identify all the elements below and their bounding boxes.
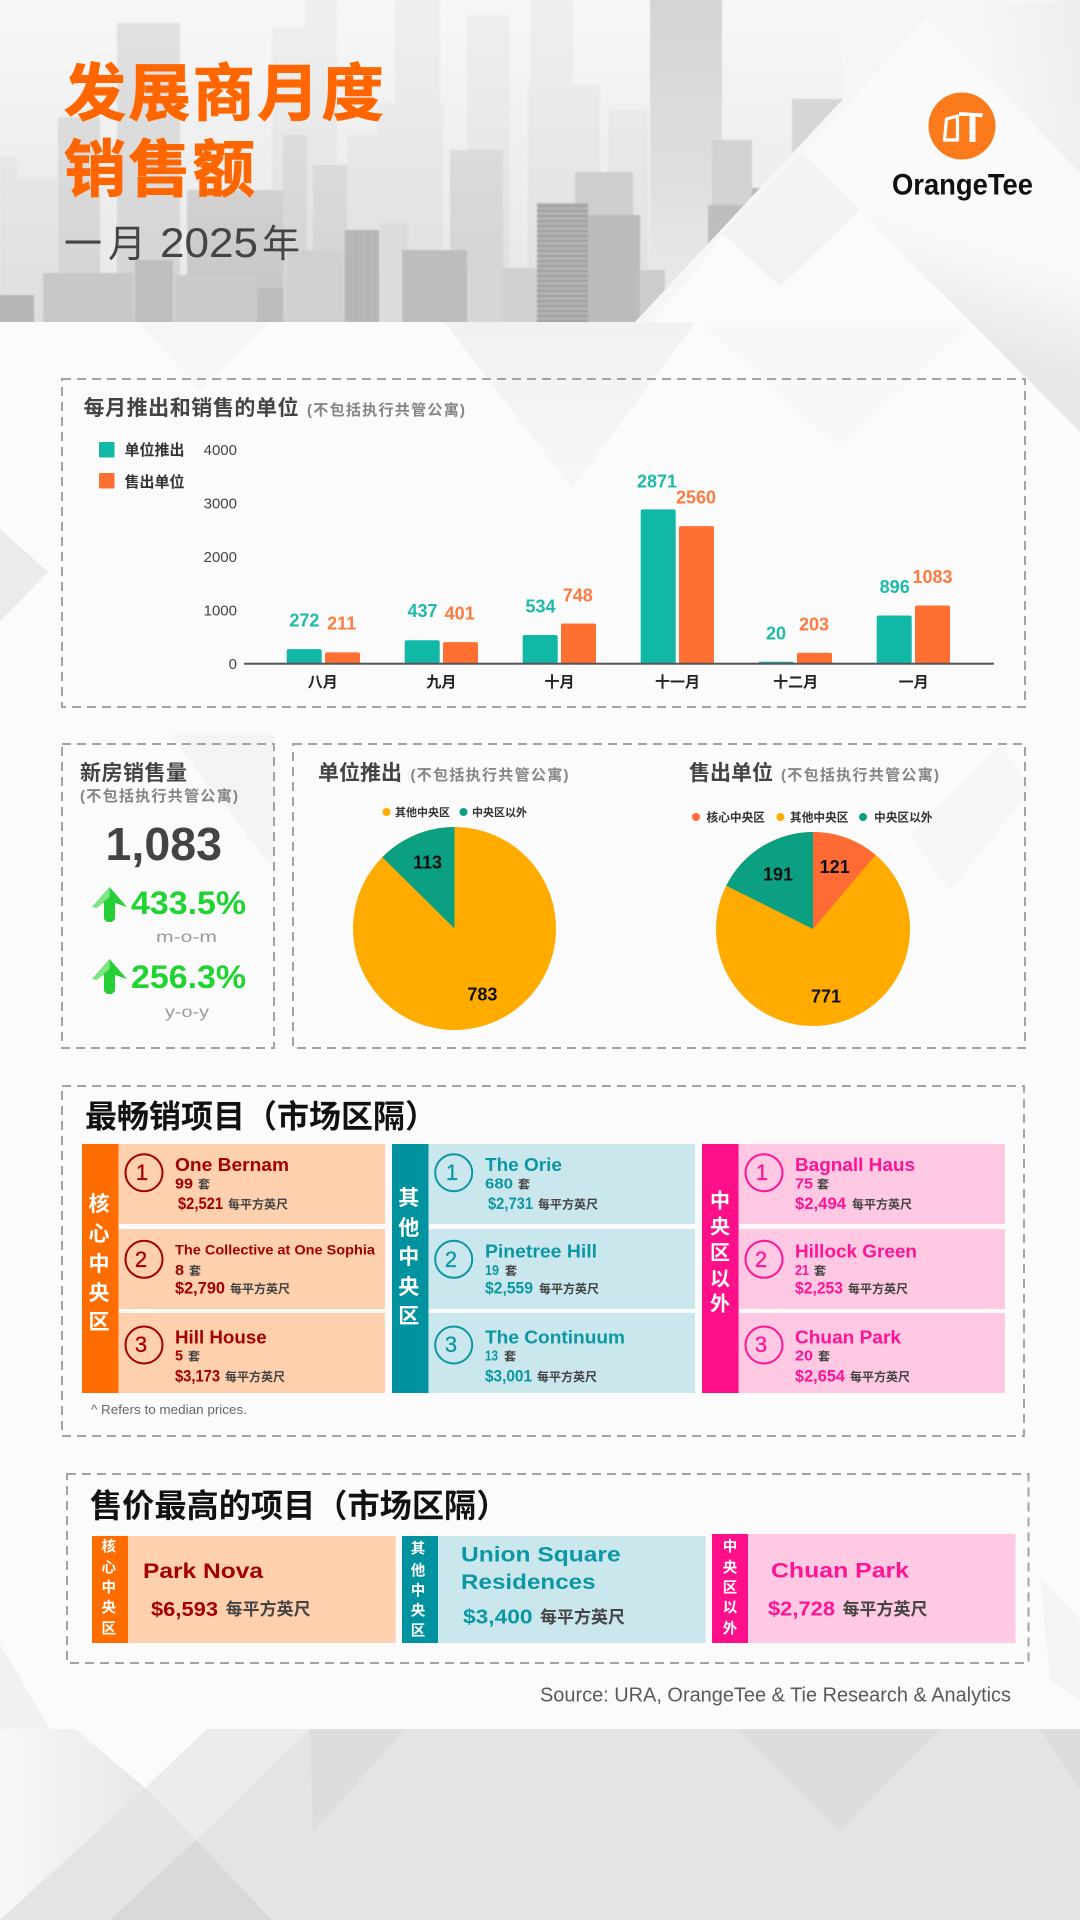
project: Bagnall Haus: Bagnall Haus — [795, 1155, 915, 1175]
project: Bagnall Haus: 套 — [817, 1177, 829, 1192]
source note: Source: URA, OrangeTee & Tie Research & Analytics — [540, 1685, 1011, 1707]
pie legend: launched: 其他中央区 — [395, 805, 450, 819]
bar value labels: 534 — [525, 596, 556, 616]
pie legend: sold — [692, 810, 933, 824]
title: 销售额 — [64, 136, 257, 205]
rank numbers — [755, 1160, 768, 1357]
region label — [88, 1192, 110, 1334]
project: Hillock Green: 21 — [795, 1262, 809, 1279]
project: Hill House: 每平方英尺 — [225, 1369, 285, 1384]
icon: up arrow m-o-m — [92, 887, 127, 922]
logo: OrangeTee — [892, 92, 1033, 202]
region label: 以 — [710, 1268, 730, 1290]
project: The Orie: 每平方英尺 — [538, 1197, 598, 1212]
heading: new home sales: 新房销售量 — [80, 761, 187, 785]
project: Pinetree Hill: 套 — [505, 1263, 517, 1278]
card: core central region: 每平方英尺 — [226, 1599, 311, 1619]
bar chart axis labels: 1000 — [204, 602, 237, 620]
region label: 区 — [88, 1311, 110, 1334]
card: outside central region: 中 — [723, 1538, 737, 1556]
pie chart: sold units — [716, 832, 910, 1026]
chart legend — [99, 441, 185, 491]
bar value labels: 211 — [327, 614, 356, 634]
bar chart axis labels: 4000 — [204, 442, 237, 459]
project: Hill House: 套 — [188, 1349, 200, 1364]
skyline photo header — [0, 0, 847, 325]
region label: 央 — [710, 1216, 730, 1238]
stat: m-o-m growth — [131, 885, 246, 946]
card: rest of central region: 每平方英尺 — [540, 1607, 625, 1627]
rank numbers: 2 — [755, 1247, 767, 1272]
heading: monthly units: (不包括执行共管公寓) — [307, 401, 465, 419]
project: Pinetree Hill — [485, 1242, 599, 1298]
bar value labels: 2560 — [676, 488, 716, 508]
column: core central region — [82, 1144, 385, 1393]
project: Hillock Green: Hillock Green — [795, 1242, 917, 1262]
month labels: 九月 — [426, 674, 456, 691]
project: Bagnall Haus: 每平方英尺 — [852, 1197, 912, 1212]
month labels: 十一月 — [655, 674, 700, 691]
project: The Continuum: $3,001 — [485, 1366, 532, 1385]
card: rest of central region: 中 — [411, 1582, 425, 1600]
heading: sold units — [689, 761, 939, 785]
region label: 央 — [398, 1276, 419, 1299]
bar chart axis labels: 2000 — [204, 549, 237, 566]
card: rest of central region: Union Square — [461, 1544, 621, 1567]
title: 发展商月度 — [64, 60, 386, 129]
heading: monthly units — [84, 396, 465, 420]
project: Chuan Park: 每平方英尺 — [850, 1369, 910, 1384]
project: The Orie: $2,731 — [488, 1194, 533, 1213]
project: Chuan Park: 套 — [818, 1349, 830, 1364]
pie legend: sold: 中央区以外 — [874, 810, 933, 824]
pie chart: launched units: 113 — [413, 852, 442, 872]
month labels: 一月 — [899, 674, 929, 691]
card: core central region: 中 — [101, 1580, 116, 1596]
pie legend: launched — [382, 805, 527, 819]
rank badges — [746, 1154, 782, 1364]
heading: monthly units: 每月推出和销售的单位 — [84, 396, 298, 420]
bar chart axis labels: 3000 — [204, 496, 237, 512]
pie chart: sold units: 771 — [811, 986, 841, 1006]
bar chart axis labels: 0 — [229, 656, 237, 673]
pie legend: launched: 中央区以外 — [472, 805, 527, 819]
chart legend: 售出单位 — [124, 473, 185, 491]
region label: 核 — [88, 1192, 110, 1216]
region label: 心 — [88, 1223, 110, 1246]
stat: y-o-y growth: 256.3% — [131, 959, 246, 995]
project: Pinetree Hill: Pinetree Hill — [485, 1242, 597, 1262]
card: outside central region — [712, 1534, 1016, 1643]
heading: launched units: (不包括执行共管公寓) — [410, 766, 568, 784]
pie chart: sold units: 191 — [763, 864, 793, 884]
project: The Continuum: 每平方英尺 — [537, 1369, 597, 1384]
card: core central region: $6,593 — [151, 1599, 218, 1621]
subtitle: date — [64, 219, 300, 266]
card: core central region: Park Nova — [143, 1560, 263, 1583]
heading: highest prices: 售价最高的项目（市场区隔） — [90, 1488, 508, 1524]
bar value labels: 20 — [766, 624, 786, 644]
project: The Collective at One Sophia: 每平方英尺 — [230, 1281, 290, 1296]
project: The Orie: The Orie — [485, 1155, 562, 1175]
pie chart: launched units: 783 — [467, 984, 497, 1004]
month labels: 十月 — [544, 674, 575, 691]
project: One Bernam: 每平方英尺 — [228, 1197, 288, 1212]
heading: sold units: (不包括执行共管公寓) — [781, 766, 939, 784]
region label: 区 — [710, 1242, 730, 1264]
project: Chuan Park — [795, 1327, 910, 1385]
card: outside central region: 区 — [723, 1580, 737, 1596]
bar value labels: 748 — [563, 586, 593, 606]
rank badges — [126, 1154, 162, 1364]
pie chart: launched units — [353, 827, 556, 1030]
project: One Bernam: 99 — [175, 1176, 193, 1192]
project: The Orie — [485, 1155, 598, 1213]
column: outside central region — [702, 1144, 1005, 1393]
panel: pie charts — [293, 744, 1025, 1048]
region label: 中 — [710, 1190, 730, 1212]
bar value labels: 401 — [445, 604, 475, 624]
project: Hillock Green — [795, 1242, 917, 1298]
panel: highest priced projects — [67, 1474, 1028, 1663]
card: rest of central region: 区 — [411, 1624, 425, 1640]
rank numbers: 2 — [135, 1247, 147, 1272]
project: Chuan Park: $2,654 — [795, 1366, 846, 1385]
card: outside central region: Chuan Park — [771, 1560, 909, 1583]
project: Bagnall Haus — [795, 1155, 915, 1213]
heading: launched units: 单位推出 — [318, 761, 402, 785]
rank numbers — [445, 1160, 458, 1357]
card: rest of central region: 央 — [411, 1602, 426, 1620]
rank badges — [435, 1154, 472, 1364]
project: The Collective at One Sophia: The Collective at One Sophia — [175, 1241, 375, 1257]
pie legend: sold: 核心中央区 — [706, 810, 765, 824]
pie chart: sold units: 121 — [820, 857, 850, 877]
heading: best sellers: 最畅销项目（市场区隔） — [85, 1098, 437, 1134]
bar value labels: 272 — [289, 610, 319, 630]
stat: m-o-m growth: m-o-m — [156, 929, 217, 946]
rank numbers: 3 — [445, 1332, 457, 1357]
rank numbers: 2 — [445, 1247, 457, 1272]
project: The Orie: 680 — [485, 1176, 513, 1192]
stat: m-o-m growth: 433.5% — [131, 885, 246, 921]
bar value labels: 203 — [799, 614, 829, 634]
month labels: 八月 — [308, 674, 338, 691]
project: Bagnall Haus: $2,494 — [795, 1194, 847, 1213]
project: The Collective at One Sophia — [175, 1241, 375, 1298]
region label — [398, 1187, 419, 1328]
panel: monthly launches and sales — [62, 379, 1025, 707]
region label: 他 — [398, 1217, 419, 1240]
card: rest of central region: $3,400 — [463, 1607, 532, 1629]
project: Pinetree Hill: $2,559 — [485, 1279, 533, 1298]
project: Hill House — [175, 1327, 285, 1385]
region label: 央 — [88, 1282, 110, 1305]
project: The Collective at One Sophia: 8 — [175, 1262, 184, 1279]
card: outside central region: 央 — [723, 1560, 738, 1576]
project: Pinetree Hill: 每平方英尺 — [539, 1281, 599, 1296]
heading: new home sales: (不包括执行共管公寓) — [80, 787, 238, 805]
card: rest of central region: Residences — [461, 1571, 596, 1594]
project: The Collective at One Sophia: $2,790 — [175, 1279, 225, 1298]
project: Hillock Green: 套 — [814, 1263, 826, 1278]
logo: OrangeTee: OrangeTee — [892, 168, 1033, 202]
heading: launched units — [318, 761, 568, 785]
region label: 其 — [398, 1187, 419, 1210]
card: core central region — [92, 1536, 396, 1643]
subtitle: date: 一月 — [64, 224, 152, 266]
bar value labels: 1083 — [912, 567, 953, 587]
month labels — [308, 674, 929, 691]
card: outside central region: $2,728 — [768, 1599, 835, 1621]
region label: 中 — [88, 1253, 110, 1276]
rank numbers — [135, 1160, 148, 1357]
project: One Bernam: One Bernam — [175, 1155, 289, 1175]
project: The Orie: 套 — [518, 1177, 530, 1192]
region label: 区 — [398, 1305, 419, 1328]
project: Hill House: 5 — [175, 1348, 183, 1365]
subtitle: date: 2025 — [160, 219, 258, 266]
region label — [710, 1190, 730, 1316]
rank numbers: 1 — [756, 1160, 768, 1185]
card: outside central region: 每平方英尺 — [842, 1599, 928, 1619]
project: The Continuum — [485, 1327, 625, 1385]
rank numbers: 1 — [136, 1160, 148, 1185]
big number: 1,083 — [106, 818, 222, 870]
project: One Bernam — [175, 1155, 289, 1213]
card: core central region: 核 — [101, 1538, 116, 1556]
card: core central region: 区 — [101, 1622, 116, 1638]
card: rest of central region: 其 — [411, 1540, 425, 1558]
card: outside central region: 外 — [723, 1620, 738, 1638]
column: rest of central region — [392, 1144, 695, 1393]
project: Hillock Green: 每平方英尺 — [848, 1281, 908, 1296]
heading: sold units: 售出单位 — [689, 761, 773, 785]
footnote: ^ Refers to median prices. — [91, 1403, 247, 1417]
project: One Bernam: $2,521 — [178, 1194, 223, 1213]
stat: y-o-y growth: y-o-y — [165, 1004, 209, 1021]
card: core central region: 央 — [101, 1600, 116, 1616]
project: Hill House: Hill House — [175, 1327, 267, 1347]
project: The Continuum: The Continuum — [485, 1327, 625, 1347]
project: One Bernam: 套 — [198, 1177, 210, 1192]
rank numbers: 3 — [135, 1332, 147, 1357]
panel: best selling projects — [62, 1086, 1024, 1436]
project: The Collective at One Sophia: 套 — [189, 1263, 201, 1278]
card: rest of central region: 他 — [411, 1562, 426, 1580]
bar chart axis labels — [204, 442, 237, 673]
bar value labels: 896 — [880, 577, 910, 597]
region label: 外 — [710, 1292, 730, 1316]
project: Hill House: $3,173 — [175, 1366, 220, 1385]
rank numbers: 1 — [446, 1160, 458, 1185]
bar chart: bars — [244, 509, 994, 665]
bar value labels: 2871 — [637, 472, 677, 492]
pie legend: sold: 其他中央区 — [790, 810, 849, 824]
card: outside central region: 以 — [723, 1600, 738, 1616]
project: Chuan Park: 20 — [795, 1348, 813, 1365]
project: Hillock Green: $2,253 — [795, 1279, 843, 1298]
region label: 中 — [398, 1246, 419, 1269]
bar value labels: 437 — [407, 601, 438, 621]
panel: new home sales — [62, 744, 274, 1048]
project: The Continuum: 13 — [485, 1348, 498, 1365]
project: Pinetree Hill: 19 — [485, 1262, 499, 1279]
project: Bagnall Haus: 75 — [795, 1176, 813, 1192]
project: Chuan Park: Chuan Park — [795, 1327, 902, 1347]
title — [64, 60, 386, 205]
icon: up arrow y-o-y — [92, 959, 127, 994]
bar value labels — [289, 472, 953, 644]
card: core central region: 心 — [101, 1560, 116, 1576]
project: The Continuum: 套 — [504, 1349, 516, 1364]
stat: y-o-y growth — [131, 959, 246, 1021]
month labels: 十二月 — [773, 674, 818, 691]
rank numbers: 3 — [755, 1332, 767, 1357]
heading: new home sales — [80, 761, 238, 805]
card: rest of central region — [402, 1536, 706, 1643]
chart legend: 单位推出 — [124, 441, 185, 459]
subtitle: date: 年 — [262, 224, 300, 266]
